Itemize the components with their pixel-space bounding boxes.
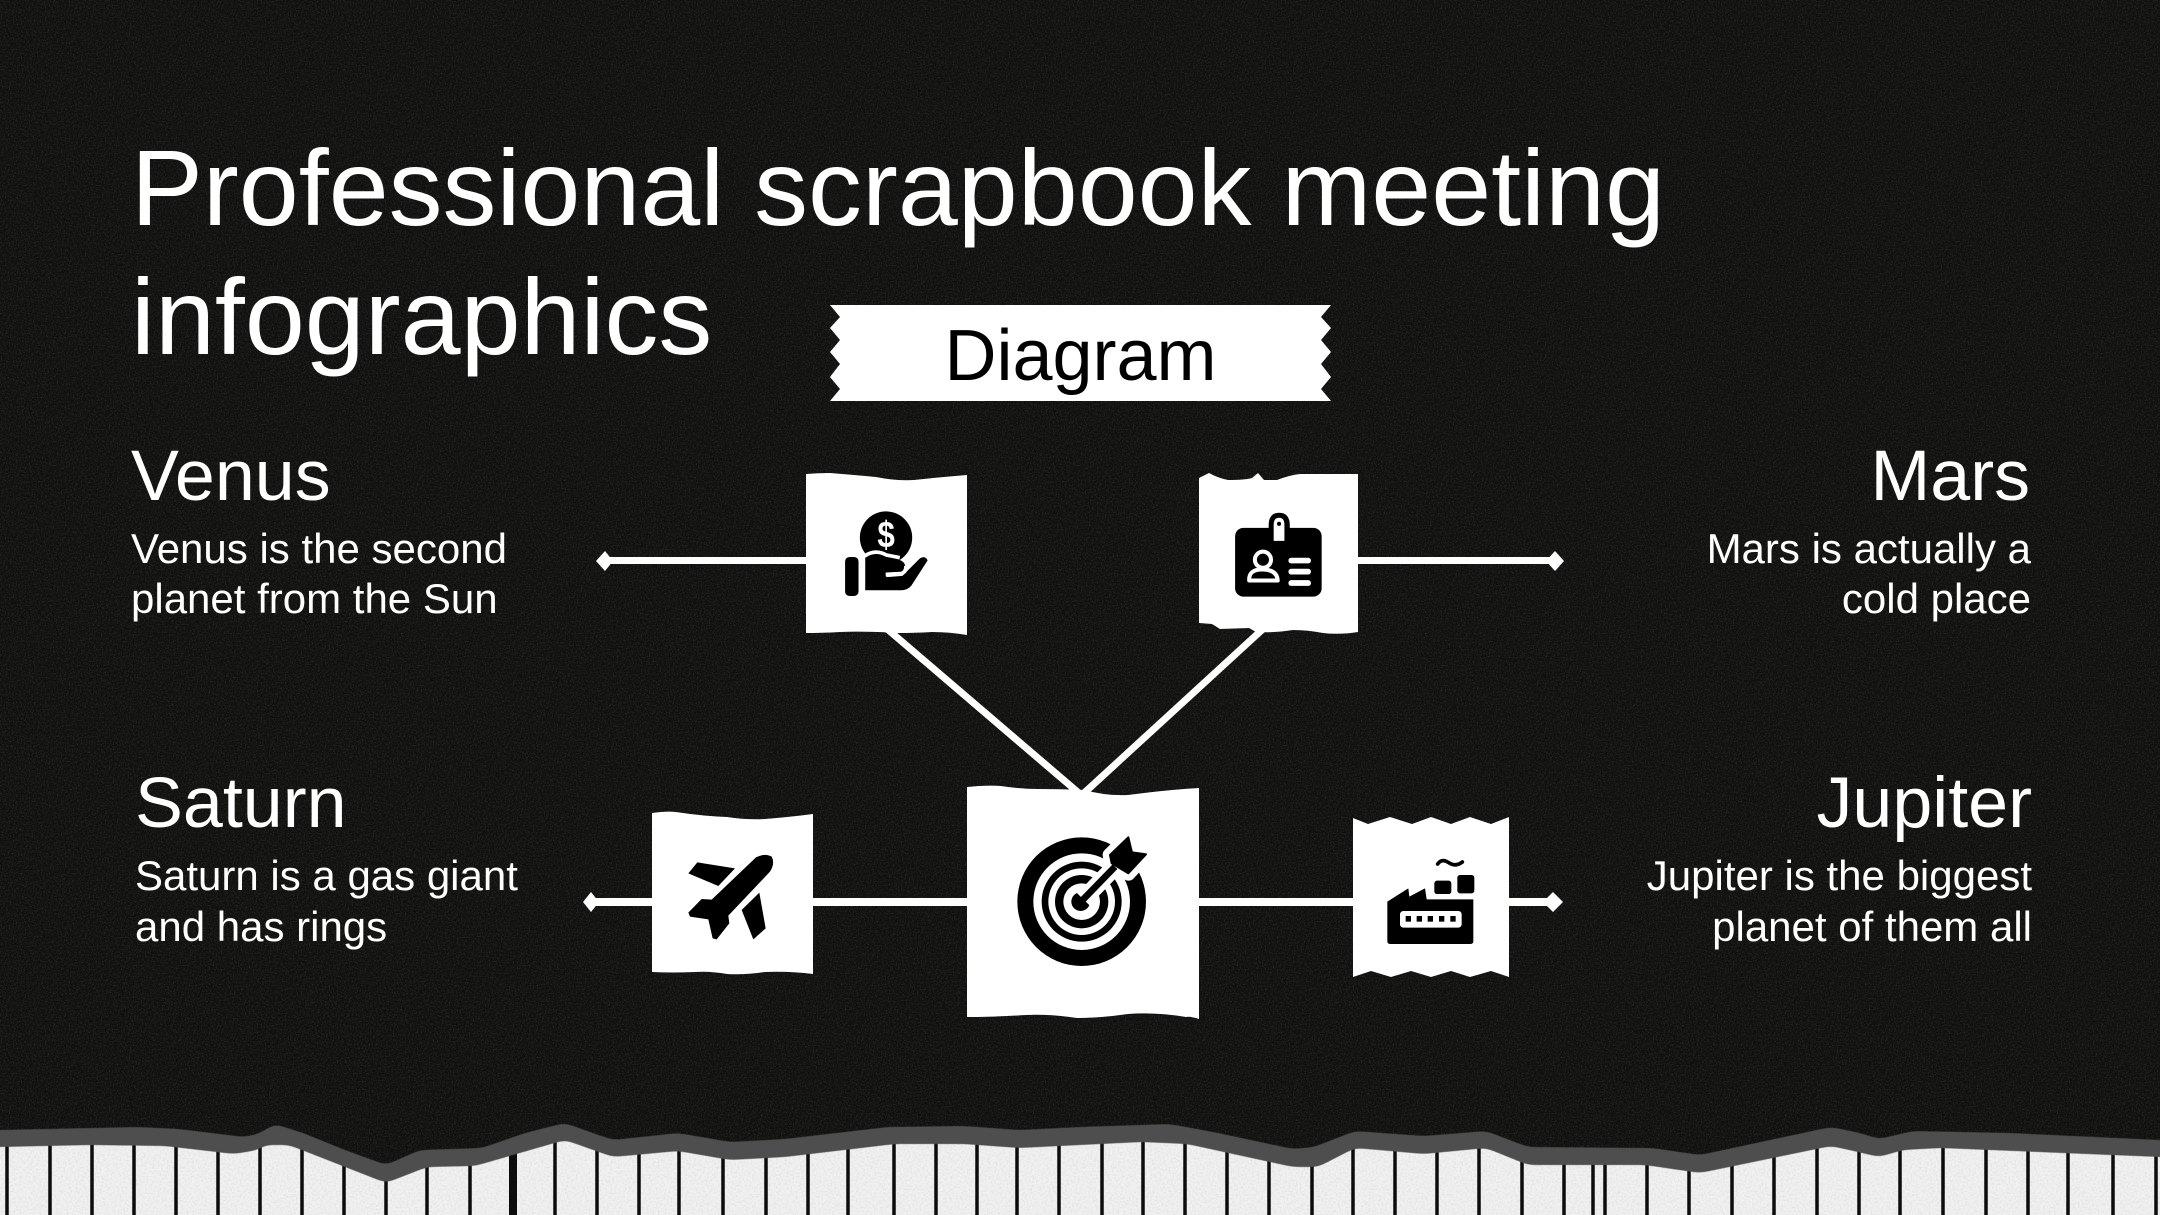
connector: Venus to left endpoint <box>596 551 810 571</box>
icon: ID badge <box>1235 513 1322 597</box>
panel: plane icon card <box>652 812 813 974</box>
banner: Diagram <box>830 305 1331 401</box>
icon: airplane <box>688 855 773 939</box>
grey torn edge <box>0 1123 2160 1183</box>
text block: Saturn: and has rings <box>135 903 387 950</box>
panel: Mars icon card <box>1199 473 1358 634</box>
panel: Venus icon card <box>806 473 967 635</box>
text block: Venus: Venus <box>131 436 331 516</box>
text block: Mars <box>1707 436 2032 622</box>
panel: central target card <box>967 786 1199 1019</box>
lined paper <box>0 1140 2160 1215</box>
text block: Mars: Mars <box>1870 436 2030 516</box>
text block: Jupiter: Jupiter is the biggest <box>1647 852 2032 899</box>
text block: Jupiter: planet of them all <box>1712 903 2032 950</box>
title: infographics <box>131 256 712 377</box>
title: Professional scrapbook meeting <box>131 127 1665 248</box>
connector: Mars to centre <box>1083 628 1264 794</box>
torn paper strip <box>0 1124 2160 1215</box>
icon: target with dart <box>1017 837 1146 966</box>
text block: Mars: cold place <box>1842 575 2031 622</box>
icon: hand holding coin <box>845 511 928 596</box>
connector: horizontal row through centre <box>583 892 1563 912</box>
text block: Jupiter: Jupiter <box>1816 763 2032 843</box>
text block: Saturn: Saturn is a gas giant <box>135 852 518 899</box>
text block: Jupiter <box>1647 763 2032 950</box>
title <box>131 127 1665 377</box>
icon: factory <box>1387 861 1474 944</box>
text block: Mars: Mars is actually a <box>1707 525 2032 572</box>
text block: Venus <box>131 436 507 622</box>
icon: hand holding coin: $ <box>877 515 895 556</box>
text block: Saturn <box>135 763 518 950</box>
banner: Diagram: Diagram <box>944 316 1217 396</box>
panel: factory icon card <box>1353 817 1509 977</box>
text block: Venus: Venus is the second <box>131 525 507 572</box>
connector: Venus to centre <box>886 628 1080 794</box>
text block: Saturn: Saturn <box>135 763 347 843</box>
connector: Mars to right endpoint <box>1355 551 1564 571</box>
text block: Venus: planet from the Sun <box>131 575 498 622</box>
